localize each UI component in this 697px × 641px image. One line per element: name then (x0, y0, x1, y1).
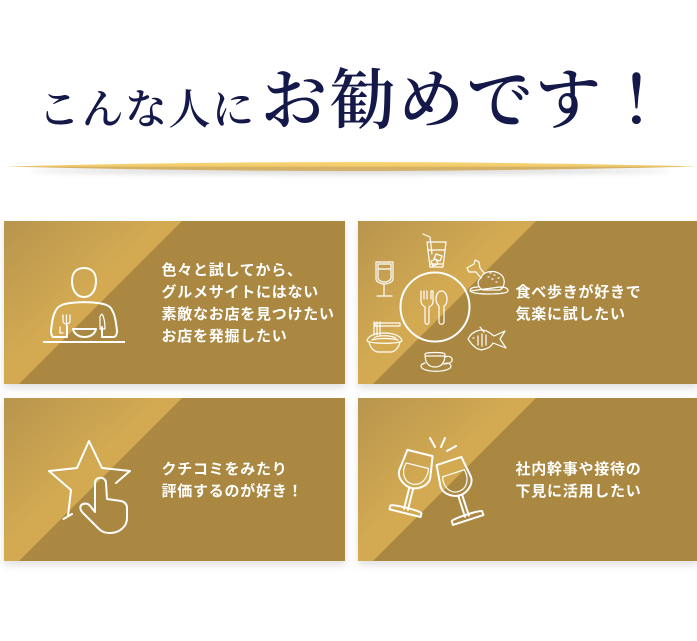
icon: roast chicken (467, 260, 508, 294)
title: こんな人に (38, 88, 256, 134)
title: お勧めです！ (261, 65, 672, 138)
text: company events: 下見に活用したい (516, 483, 642, 500)
gold divider rule (5, 162, 697, 174)
icon: diner at table (43, 268, 125, 342)
icon: fish (468, 327, 506, 350)
text: try many shops: 色々と試してから、 (162, 262, 303, 279)
icon: toasting glasses (389, 438, 483, 525)
panel: food walking (358, 221, 697, 384)
panel: try many shops (4, 221, 345, 384)
icon: food circle (367, 234, 508, 371)
text: reviews: クチコミをみたり (162, 461, 288, 478)
title (38, 65, 672, 138)
clink sparks (430, 438, 456, 451)
icon: iced drink (423, 234, 446, 267)
panel: reviews (4, 398, 345, 561)
right glass (434, 456, 483, 525)
text: try many shops: 素敵なお店を見つけたい (162, 306, 335, 323)
panel: company events (358, 398, 697, 561)
text: food walking: 食べ歩きが好きで (516, 284, 642, 301)
text: try many shops: お店を発掘したい (162, 327, 288, 345)
text: reviews: 評価するのが好き！ (162, 482, 303, 500)
icon: star and pointing hand (49, 441, 130, 533)
left glass (389, 449, 436, 517)
text: food walking: 気楽に試したい (516, 305, 626, 323)
icon: wine glass (376, 262, 393, 296)
icon: coffee cup (421, 352, 452, 371)
icon: noodles bowl (367, 322, 402, 352)
text: try many shops: グルメサイトにはない (162, 283, 319, 301)
text: company events: 社内幹事や接待の (516, 461, 642, 478)
